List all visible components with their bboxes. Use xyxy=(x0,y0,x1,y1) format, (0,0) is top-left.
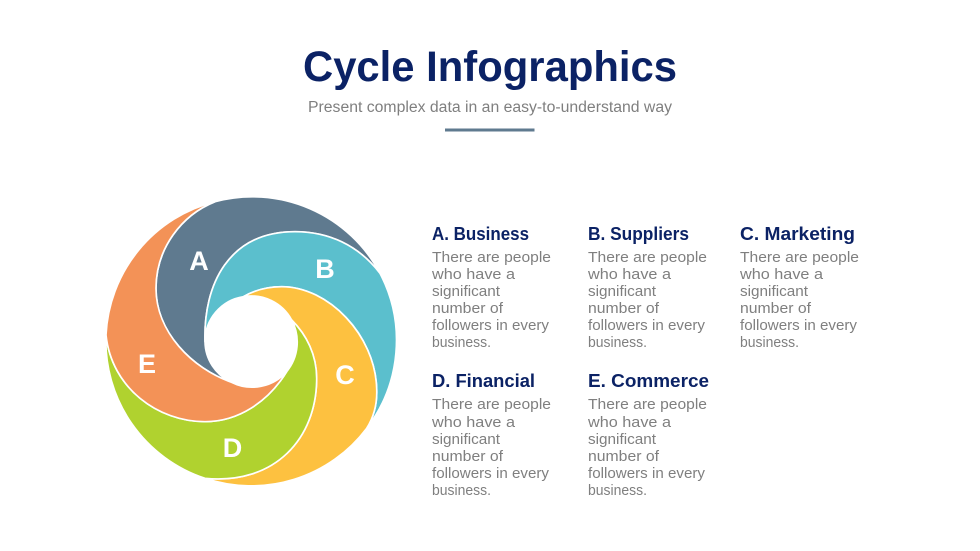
heading A: A. Business xyxy=(432,223,529,244)
body B: significant xyxy=(588,283,657,300)
body E: business. xyxy=(588,482,647,499)
body C: significant xyxy=(740,283,809,300)
body A: who have a xyxy=(431,266,516,283)
body B: number of xyxy=(588,300,660,317)
letter A: A xyxy=(189,246,209,276)
heading D: D. Financial xyxy=(432,370,535,391)
body D xyxy=(431,396,551,499)
text block: B. Suppliers xyxy=(587,223,707,351)
body B: followers in every xyxy=(588,317,705,334)
segment E xyxy=(106,202,287,422)
body E: who have a xyxy=(587,414,672,431)
body A xyxy=(431,249,551,351)
body E: significant xyxy=(588,431,657,448)
body E: number of xyxy=(588,448,660,465)
title divider xyxy=(445,128,534,132)
body B: business. xyxy=(588,334,647,351)
segment D xyxy=(106,320,317,479)
subtitle: Present complex data in an easy-to-understand way xyxy=(308,99,672,116)
spiral segments xyxy=(106,197,396,486)
body C: There are people xyxy=(740,249,859,266)
body A: There are people xyxy=(432,249,551,266)
body D: who have a xyxy=(431,414,516,431)
body C: number of xyxy=(740,300,812,317)
segment B xyxy=(205,232,396,428)
text block: A. Business xyxy=(431,223,551,351)
heading E: E. Commerce xyxy=(588,370,709,391)
text block: D. Financial xyxy=(431,370,551,499)
segment C xyxy=(205,287,377,486)
heading C: C. Marketing xyxy=(740,223,855,244)
segment A xyxy=(156,197,380,382)
body D: number of xyxy=(432,448,504,465)
body C: business. xyxy=(740,334,799,351)
letter D: D xyxy=(223,433,242,463)
heading B: B. Suppliers xyxy=(588,223,689,244)
body D: significant xyxy=(432,431,501,448)
text block: C. Marketing xyxy=(739,223,859,351)
text block: E. Commerce xyxy=(587,370,709,499)
body D: There are people xyxy=(432,396,551,413)
title: Cycle Infographics xyxy=(303,43,677,91)
body C: followers in every xyxy=(740,317,857,334)
letter B: B xyxy=(315,254,335,284)
body B: who have a xyxy=(587,266,672,283)
body D: business. xyxy=(432,482,491,499)
body A: followers in every xyxy=(432,317,549,334)
body A: significant xyxy=(432,283,501,300)
cycle diagram xyxy=(106,197,396,486)
body C: who have a xyxy=(739,266,824,283)
body C xyxy=(739,249,859,351)
body E: followers in every xyxy=(588,465,705,482)
body A: business. xyxy=(432,334,491,351)
letter C: C xyxy=(335,360,355,390)
letter E: E xyxy=(138,349,156,379)
body D: followers in every xyxy=(432,465,549,482)
body E: There are people xyxy=(588,396,707,413)
body B xyxy=(587,249,707,351)
body A: number of xyxy=(432,300,504,317)
body B: There are people xyxy=(588,249,707,266)
body E xyxy=(587,396,707,499)
